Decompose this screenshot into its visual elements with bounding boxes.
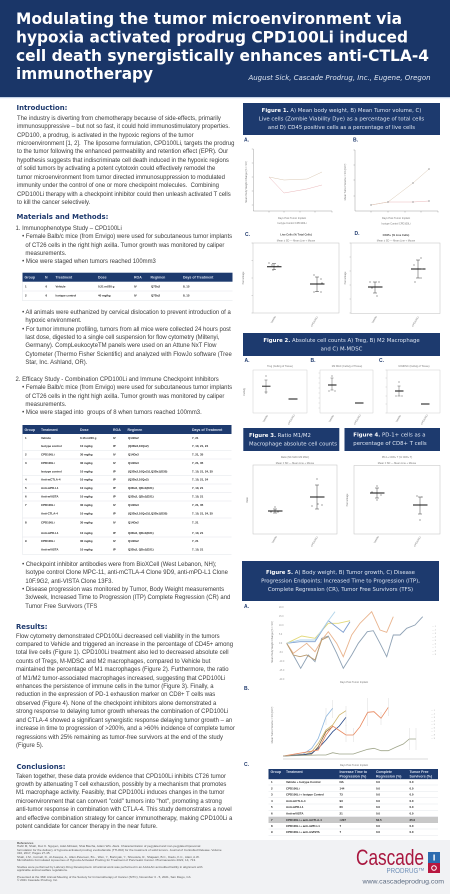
methods table 2: CPD100Li (41, 461, 55, 465)
chart 5B: tumor growth lines: Days Post Tumor Implant (340, 764, 368, 767)
chart 1D: CD45 cells: Mean ± SD — Mean Line + Mouse (377, 240, 416, 242)
methods table 2: 7, 21 (192, 539, 199, 543)
figure 1 caption: and D) CD45 positive cells as a percentage of live cells (268, 125, 415, 131)
logo: Cascade Prodrug: Cascade (356, 845, 424, 870)
chart 1A: mean body weight: Days Post Tumor Implant (278, 217, 306, 220)
chart 5B: tumor growth lines: — 8 (431, 734, 436, 736)
figure 5C table: Anti-mCTLA-4 (286, 799, 306, 803)
figure 5C table: Tumor Free (410, 770, 429, 774)
chart 1A: mean body weight: Isotype Control CPD100Li (278, 222, 307, 225)
figure 5C table: 3 (271, 792, 273, 796)
methods table 2: (Q3Dx2,10Qx2)1,Q3Dx1(D35) (128, 469, 167, 473)
chart 5A: body weight lines: -15.0 (279, 670, 285, 672)
figure 5C table (244, 762, 438, 836)
text: euthanasia and profiling bullets: • All animals were euthanized by cervical dislocation to prevent introduction of a hypoxic environment. • For tumor immune profiling, tumors from all mice were collected 24 hours post last dose, digested to a single cell suspension for flow cytometry (Miltenyi, Germany). CompLeukocyteTM panels were used on an Attune NxT Flow Cytometer (Thermo Fisher Scientific) and analyzed with FlowJo software (Tree Star, Inc. Ashland, OR). (16, 310, 232, 366)
chart 5B: tumor growth lines: — 2 (431, 714, 436, 716)
figure 5C table: CPD100Li + anti-mCTLA-4 (286, 818, 322, 822)
methods table 1: 6 (46, 294, 48, 298)
figure 5C table: Treatment (286, 770, 304, 774)
methods table 1: Isotype control (56, 294, 76, 298)
methods table 2: 30 mg/kg (80, 503, 93, 507)
methods table 2: IV (113, 461, 116, 465)
methods table 2: Isotype control (41, 469, 62, 473)
methods table 1: 8, 15 (183, 294, 190, 298)
methods table 2: 9 (25, 539, 27, 543)
chart 4: PD-1 on CD8: PD-1+ CD8+ T (% CD8+ T) (382, 456, 412, 459)
figure 5C table: 7 (271, 818, 273, 822)
figure 5C table: 1 (271, 780, 273, 784)
chart 1B: mean tumor volume: Days Post Tumor Implant (382, 217, 410, 220)
methods table 2: 10 mg/kg (80, 478, 93, 482)
figure 5C table: 0.0 (410, 792, 414, 796)
figure 2 caption: and C) M-MDSC (321, 346, 363, 352)
chart 1C: live cells: Vehicle (270, 315, 277, 324)
chart 4: PD-1 on CD8: Percentage (346, 493, 349, 506)
chart 2B: M2 macrophage: CPD100Li (353, 414, 362, 425)
title: cell death synergistically enhances anti-CTLA-4 (16, 47, 429, 65)
methods table 1: 40 mg/kg (98, 294, 111, 298)
chart 4: PD-1 on CD8 (346, 456, 440, 547)
chart 2A: Treg: Vehicle (262, 414, 269, 423)
logo: Cascade Prodrug: PRODRUG™ (386, 866, 424, 875)
methods table 2: 2 (25, 453, 27, 457)
chart 5A: body weight lines: 20.0 (279, 607, 284, 609)
text: results: Flow cytometry demonstrated CPD100Li decreased cell viability in the tumors compared to Vehicle and triggered an increase in the percentage of CD45+ among total live cells (Figure 1). CPD100Li treatment also led to decreased absolute cell counts of Tregs, M-MDSC and M2 macrophages, compared to Vehicle but maintained the percentage of M1 macrophages (Figure 2). Furthermore, the ratio of M1/M2 tumor-associated macrophages increased, suggesting that CPD100Li enhances the persistence of immune cells in the tumor (Figure 3). Finally, a reduction in the expression of PD-1 exhaustion marker on CD8+ T cells was observed (Figure 4). None of the checkpoint inhibitors alone demonstrated a strong response to delaying tumor growth whereas the combination of CPD100Li and CTLA-4 showed a significant synergistic response delaying tumor growth – an increase in time to progression of >200%, and a >60% incidence of complete tumor regressions with 25% remaining as tumor-free survivors at the end of the study (Figure 5). (16, 634, 235, 749)
chart 1D: CD45 cells (344, 231, 440, 327)
chart 5A: body weight lines: -10.0 (279, 661, 285, 663)
methods table 1: Dose (98, 276, 107, 280)
methods table 1: Regimen (150, 276, 165, 280)
chart 5A: body weight lines: — 8 (432, 650, 437, 652)
chart 5A: body weight lines (244, 604, 437, 684)
methods table 1: Q7Dx2 (151, 284, 161, 288)
chart 5A: body weight lines: 10.0 (279, 625, 284, 627)
methods table 1: Group (24, 276, 35, 280)
figure 5C table: 0.0 (410, 805, 414, 809)
chart 1D: CD45 cells: Percentage (344, 271, 347, 284)
heading: conclusions: Conclusions: (16, 762, 66, 770)
methods table 2: Q14Dx2 (128, 521, 139, 525)
chart 1D: CD45 cells: D. (354, 231, 360, 237)
chart 5B: tumor growth lines: — 9 (431, 738, 436, 740)
figure 5C table: >207 (340, 818, 346, 822)
figure 5C table: 73 (340, 792, 343, 796)
title: immunotherapy (16, 65, 153, 83)
methods table 2: 3 (25, 461, 27, 465)
chart 5A: body weight lines: Days Post Tumor Implant (340, 681, 368, 684)
chart 1B: mean tumor volume: Isotype Control CPD100Li (382, 222, 411, 226)
figure 5C table: 5 (271, 805, 273, 809)
methods table 2: CPD100Li (41, 453, 55, 457)
chart 2C: M-MDSC: Vehicle (395, 414, 402, 423)
methods table 2: 10 mg/kg (80, 444, 93, 448)
chart 3: M1/M2 ratio (246, 456, 337, 547)
figure 5C table: NA (340, 780, 345, 784)
website url: www.cascadeprodrug.com (361, 878, 444, 885)
chart 1A: mean body weight (244, 138, 332, 225)
methods table 2: 30 mg/kg (80, 521, 93, 525)
chart 1A: mean body weight: A. (244, 138, 250, 144)
methods table 2: Anti-mVISTA (41, 494, 59, 498)
chart 5B: tumor growth lines: — 3 (431, 717, 436, 719)
figure 5C table: 7 (340, 830, 342, 834)
figure 5C table: 0.0 (410, 799, 414, 803)
chart 1D: CD45 cells: Vehicle (371, 315, 378, 324)
figure 5C table: 4 (271, 799, 273, 803)
chart 3: M1/M2 ratio: Ratio (246, 496, 249, 503)
methods table 2: (Q3Dx2,10Qx2) (128, 478, 149, 482)
chart 1C: live cells: CPD100Li (310, 316, 319, 327)
chart 5A: body weight lines: A. (244, 604, 250, 610)
methods table 2: 1 (25, 436, 27, 440)
methods table 2: 10 mg/kg (80, 469, 93, 473)
figure 5C table: 7 (340, 824, 342, 828)
methods table 2: Q3Dx2, QDx1(D21) (128, 486, 154, 490)
figure 5C table: 0.0 (376, 805, 380, 809)
figure 5C table: Increase Time to (340, 770, 367, 774)
methods table 1 (22, 273, 232, 301)
figure 4 caption: Figure 4. PD-1+ cells as a (353, 432, 426, 438)
methods table 2: IV (113, 521, 116, 525)
methods table 2: Q14Dx2 (128, 436, 139, 440)
figure 5C table: CPD100Li + anti-mVISTA (286, 830, 321, 834)
chart 5A: body weight lines: 0.0 (279, 643, 283, 645)
chart 5B: tumor growth lines: — 5 (431, 724, 436, 726)
header band (0, 0, 450, 98)
figure 5C table: Complete (376, 770, 392, 774)
chart 2A: Treg: CPD100Li (287, 414, 296, 425)
methods table 2: 30 mg/kg (80, 453, 93, 457)
methods table 2: IP (113, 444, 116, 448)
methods table 2: 10 mg/kg (80, 548, 93, 552)
methods table 2: Group (24, 428, 35, 432)
methods table 2: 7, 10, 21, 24 (192, 478, 208, 482)
methods table 2: IP (113, 512, 116, 516)
methods table 2: (Q3Dx2,10Qx2) (128, 444, 149, 448)
figure 2 caption: Figure 2. Absolute cell counts A) Treg, B) M2 Macrophage (263, 338, 420, 344)
figure 5C table: Anti-mVISTA (286, 811, 304, 815)
chart 1C: live cells: Percentage (242, 271, 245, 284)
figure 3 caption: Macrophage absolute cell counts (249, 442, 337, 448)
chart 5B: tumor growth lines: — 6 (431, 728, 436, 730)
figure 5 caption (242, 561, 439, 601)
chart 5B: tumor growth lines: — 7 (431, 731, 436, 733)
chart 5B: tumor growth lines: B. (244, 686, 250, 692)
author line: August Sick, Cascade Prodrug, Inc., Eugene, Oregon (247, 74, 430, 82)
text: introduction: The industry is diverting from chemotherapy because of side-effects, primarily immunosuppressive – but not so fast, it could hold immunostimulatory properties. CPD100, a prodrug, is activated in the hypoxic regions of the tumor microenvironment [1, 2]. The liposome formulation, CPD100Li, targets the prodrug to the tumor following the enhanced permeability and retention effect (EPR). Our hypothesis suggests that indiscriminate cell death induced in the hypoxic regions of solid tumors by activating a potent cytotoxin could effectively remodel the tumor microenvironment from tumor directed immunosuppression to modulated immunity under the control of one or more checkpoint molecules. Combining CPD100Li therapy with a checkpoint inhibitor could then unleash activated T cells to kill the cancer selectively. (17, 116, 234, 206)
methods table 2: Q14Dx2 (128, 539, 139, 543)
figure 5C table: 0.0 (376, 799, 380, 803)
methods table 1: Treatment (56, 276, 73, 280)
figure 5C table: 6 (271, 811, 273, 815)
heading: materials and methods: Materials and Methods: (16, 212, 108, 220)
methods table 2: 7, 10, 21, 24 (192, 444, 208, 448)
chart 5A: body weight lines: — 9 (432, 654, 437, 656)
methods table 2: 7, 21 (192, 436, 199, 440)
methods table 2: Anti-CTLA-4 (41, 512, 58, 516)
methods table 1: N (45, 276, 48, 280)
chart 4: PD-1 on CD8: Mean ± SD — Mean Line + Mouse (378, 462, 417, 465)
chart 1C: live cells: Live Cells (% Total Cells) (280, 232, 312, 236)
chart 2B: M2 macrophage: M2 MAC (Cells/g of Tissue) (332, 365, 362, 368)
methods table 2: 7, 10, 21, 24, 35 (192, 512, 213, 516)
chart 1A: mean body weight: Mean Body Weight Change (% ± SD) (245, 161, 248, 203)
methods table 2: IV (113, 453, 116, 457)
figure 5C table: CPD100Li + anti-mPD-L1 (286, 824, 320, 828)
methods table 2: CPD100Li (41, 539, 55, 543)
chart 1C: live cells: C. (245, 232, 251, 238)
methods table 1: IV (134, 284, 137, 288)
figure 1 caption (243, 103, 440, 135)
text: references and footnotes: References Hafiz M, Shah, Duc K. Nguyen, Adel Athkawi, Shai Biecha, Adam WG. Alani. Characterization of pegylated and non-pegylated liposomal formulation for the delivery of hypoxia activated prodrug evofosfamide (TH-302) for the treatment of solid tumors. Journal of Controlled Release. Volume 316, 2017, Pages 27-45. Shah, J.M., Cornell, D., Al-Kasspa, A., Allen-Petersen, B.L., Wen, Y., Bortnyak, Y., Shrestula, R., Shajaani, B.C., Davis, K.C., Alani, A.W. Microfluidics Formulated Liposomes of Hypoxia Activated Prodrug for Treatment of Pancreatic Cancer. Pharmaceutics 2022, 14, 713. Studies were performed by Labcorp Drug Development. All animal work was performed in an AAALAC accredited facility in alignment with applicable animal welfare regulations. Presented at the 36th Annual Meeting of the Society for Immunotherapy of Cancer (SITC), November 3 - 5, 2021, San Diego, CA © 2021 Cascade Prodrug, Inc. (17, 841, 222, 882)
chart 1D: CD45 cells: CPD100Li (411, 316, 420, 327)
chart 5A: body weight lines: — 5 (432, 640, 437, 642)
methods table 2: 7, 21, 35 (192, 453, 204, 457)
chart 3: M1/M2 ratio: Mean ± SD — Mean Line + Mouse (276, 462, 315, 465)
methods table 2: 10 mg/kg (80, 512, 93, 516)
methods table 2: Treatment (41, 428, 59, 432)
methods table 2: 7 (25, 503, 27, 507)
chart 2C: M-MDSC: C. (379, 358, 385, 364)
title: hypoxia activated prodrug CPD100Li induced (16, 28, 408, 46)
chart 5A: body weight lines: 15.0 (279, 616, 284, 618)
chart 2B: M2 macrophage (310, 358, 373, 425)
methods table 2: 5 (25, 486, 27, 490)
methods table 2: 30 mg/kg (80, 539, 93, 543)
methods table 2: Q14Dx3 (128, 461, 139, 465)
methods table 1: 0.21 ml/20 g (98, 284, 115, 288)
methods table 2: IP (113, 548, 116, 552)
figure 3 caption: Figure 3. Ratio M1/M2 (249, 433, 311, 439)
figure 5C table: CPD100Li + Isotype Control (286, 792, 324, 796)
chart 2C: M-MDSC: CPD100Li (420, 414, 429, 425)
chart 1B: mean tumor volume: B. (353, 138, 359, 144)
chart 5A: body weight lines: — 4 (432, 636, 437, 638)
heading: introduction: Introduction: (16, 104, 67, 112)
chart 1B: mean tumor volume (344, 138, 438, 226)
chart 5B: tumor growth lines (244, 686, 436, 767)
chart 2A: Treg: Cells/g (243, 388, 246, 396)
methods table 2: 6 (25, 494, 27, 498)
chart 2A: Treg (243, 358, 307, 425)
figure 4 caption: percentage of CD8+ T cells (353, 441, 427, 447)
methods table 2: ROA (113, 428, 121, 432)
figure 5C table: 0.0 (410, 830, 414, 834)
chart 2C: M-MDSC (379, 358, 440, 425)
text: efficacy study: 2. Efficacy Study - Combination CPD100Li and Immune Checkpoint Inhibitors • Female Balb/c mice (from Envigo) were used for subcutaneous tumor implants of CT26 cells in the right high axilla. Tumor growth was monitored by caliper measurements. • Mice were staged into groups of 8 when tumors reached 100mm3. (16, 377, 232, 416)
figure 5C table: 0.0 (376, 824, 380, 828)
figure 5C table: Vehicle + Isotype Control (286, 780, 321, 784)
figure 5C table: 0.0 (410, 824, 414, 828)
methods table 1: 1 (25, 284, 27, 288)
methods table 2: Regimen (128, 428, 142, 432)
methods table 2: 10 mg/kg (80, 494, 93, 498)
figure 5C table: C. (244, 762, 250, 768)
figure 3 caption (243, 428, 339, 451)
chart 5A: body weight lines: -20.0 (279, 679, 285, 681)
figure 5C table: 0.0 (376, 792, 380, 796)
chart 5B: tumor growth lines: — 4 (431, 720, 436, 722)
methods table 2: Q14Dx3 (128, 453, 139, 457)
chart 4: PD-1 on CD8: CPD100Li (413, 536, 422, 547)
figure 5C table: Survivors (%) (410, 774, 432, 778)
figure 1 caption: Live cells (Zombie Viability Dye) as a percentage of total cells (259, 116, 424, 122)
methods table 2: Anti-mCTLA-4 (41, 478, 61, 482)
methods table 1: ROA (134, 276, 142, 280)
figure 5C table: 8 (271, 824, 273, 828)
figure 5C table: Regression (%) (376, 774, 401, 778)
methods table 2: 7, 21, 35 (192, 503, 204, 507)
figure 5C table: 93 (340, 799, 343, 803)
figure 5C table: 0.0 (376, 811, 380, 815)
methods table 1: Days of Treatment (183, 276, 214, 280)
methods table 1: 2 (25, 294, 27, 298)
text: conclusions: Taken together, these data provide evidence that CPD100Li inhibits CT26 tumor growth by attenuating T cell exhaustion, possibly by a mechanism that promotes M1 macrophage activity. Feasibly, that CPD100Li induces changes in the tumor microenvironment that can convert "cold" tumors into "hot", promoting a strong anti-tumor response in combination with CTLA-4. This study demonstrates a novel and effective combination strategy for cancer immunotherapy, making CPD100Li a potent candidate for cancer therapy in the near future. (16, 774, 232, 830)
chart 5A: body weight lines: — 6 (432, 644, 437, 646)
methods table 2: (Q3Dx2,10Qx2)1,Q3Dx1(D35) (128, 512, 167, 516)
methods table 2: 7, 10, 21 (192, 548, 204, 552)
methods table 2: Days of Treatment (192, 428, 223, 432)
figure 5C table: CPD100Li (286, 786, 300, 790)
methods table 1: 6 (46, 284, 48, 288)
chart 5A: body weight lines: 5.0 (279, 634, 283, 636)
title (16, 10, 429, 83)
chart 2A: Treg: Treg (Cells/g of Tissue) (267, 365, 293, 368)
methods table 2 (22, 425, 232, 554)
methods table 2: Q3Dx2, QDx1(D21) (128, 548, 154, 552)
methods table 2: 7, 10, 21 (192, 531, 204, 535)
chart 5A: body weight lines: Mean Body Weight Change (% ± SD) (271, 621, 274, 663)
chart 2B: M2 macrophage: Vehicle (328, 414, 335, 423)
chart 5B: tumor growth lines: — 1 (431, 710, 436, 712)
figure 5C table: 0.0 (410, 811, 414, 815)
title: Modulating the tumor microenvironment via (16, 10, 402, 28)
methods table 2: 10 mg/kg (80, 531, 93, 535)
methods table 2: 10 mg/kg (80, 486, 93, 490)
methods table 2: IP (113, 486, 116, 490)
methods table 2: 0.16 ml/20 g (80, 436, 97, 440)
chart 5B: tumor growth lines: Mean Tumor Volume ± SD (mm³) (271, 707, 274, 743)
footer band (0, 840, 450, 894)
figure 5 caption: Figure 5. A) Body weight, B) Tumor growth, C) Disease (266, 570, 415, 576)
figure 5C table: 21 (340, 811, 343, 815)
methods table 2: Q14Dx3 (128, 503, 139, 507)
figure 5C table: 2 (271, 786, 273, 790)
chart 1C: live cells: Mean ± SD — Mean Line + Mouse (277, 240, 316, 242)
figure 4 caption (344, 428, 440, 451)
methods table 2: Anti-mVISTA (41, 548, 59, 552)
methods table 1: Vehicle (56, 284, 66, 288)
figure 5C table: 0.0 (410, 780, 414, 784)
chart 2C: M-MDSC: M-MDSC (Cells/g of Tissue) (399, 365, 430, 368)
figure 5C table: 9 (271, 830, 273, 834)
text: immunophenotype study: 1. Immunophenotype Study – CPD100Li • Female Balb/c mice (from Envigo) were used for subcutaneous tumor implants of CT26 cells in the right high axilla. Tumor growth was monitored by caliper measurements. • Mice were staged when tumors reached 100mm3 (16, 226, 232, 265)
chart 5A: body weight lines: — 2 (432, 630, 437, 632)
methods table 2: IP (113, 478, 116, 482)
chart 3: M1/M2 ratio: CPD100Li (310, 536, 319, 547)
chart 2A: Treg: A. (244, 358, 250, 364)
figure 1 caption: Figure 1. A) Mean body weight, B) Mean Tumor volume, C) (262, 108, 421, 114)
heading: results: Results: (16, 622, 48, 630)
methods table 2: IP (113, 494, 116, 498)
chart 5A: body weight lines: — 7 (432, 647, 437, 649)
methods table 2: Anti-mPD-L1 (41, 486, 59, 490)
chart 1D: CD45 cells: CD45+ (% Live Cells) (383, 233, 409, 237)
chart 4: PD-1 on CD8: Vehicle (373, 535, 380, 544)
chart 3: M1/M2 ratio: Ratio (M1 MAC:M2 MAC) (281, 456, 309, 459)
methods table 2: 30 mg/kg (80, 461, 93, 465)
figure 5C table: Anti-mPD-L1 (286, 805, 304, 809)
methods table 2: Q3Dx2, QDx1(D21) (128, 531, 154, 535)
methods table 1: 8, 15 (183, 284, 190, 288)
chart 2B: M2 macrophage: B. (310, 358, 316, 364)
methods table 2: 4 (25, 478, 27, 482)
chart 5A: body weight lines: — 3 (432, 633, 437, 635)
methods table 2: 7, 10, 21, 24, 35 (192, 469, 213, 473)
methods table 2: IV (113, 436, 116, 440)
figure 5C table: 0.0 (410, 786, 414, 790)
figure 5 caption: Progression Endpoints; Increased Time to Progression (ITP), (261, 578, 420, 584)
methods table 2: IP (113, 469, 116, 473)
figure 5C table: 144 (340, 786, 345, 790)
methods table 2: IV (113, 539, 116, 543)
methods table 2: Anti-mPD-L1 (41, 531, 59, 535)
methods table 1: Q7Dx2 (151, 294, 161, 298)
figure 5C table: 62.5 (376, 818, 382, 822)
methods table 2: CPD100Li (41, 503, 55, 507)
chart 1C: live cells (242, 232, 339, 327)
methods table 2: IV (113, 503, 116, 507)
chart 5A: body weight lines: — 1 (432, 626, 437, 628)
methods table 1: IV (134, 294, 137, 298)
figure 5C table: Group (270, 770, 281, 774)
methods table 2: IP (113, 531, 116, 535)
figure 5C table: 25.0 (410, 818, 416, 822)
methods table 2: Q3Dx2, QDx1(D21) (128, 494, 154, 498)
figure 5 caption: Complete Regression (CR), Tumor Free Survivors (TFS) (268, 587, 413, 593)
methods table 2: 7, 21 (192, 521, 199, 525)
chart 3: M1/M2 ratio: Vehicle (271, 535, 278, 544)
figure 5C table: Progression (%) (340, 774, 366, 778)
figure 5C table: 60 (340, 805, 343, 809)
figure 2 caption (243, 333, 440, 356)
methods table 2: Dose (80, 428, 89, 432)
methods table 2: CPD100Li (41, 521, 55, 525)
methods table 2: 7, 10, 21 (192, 486, 204, 490)
figure 5C table: 0.0 (376, 780, 380, 784)
methods table 2: 8 (25, 521, 27, 525)
methods table 2: Vehicle (41, 436, 51, 440)
methods table 2: 7, 21, 35 (192, 461, 204, 465)
text: checkpoint inhibitor bullets: • Checkpoint inhibitor antibodies were from BioXCell (West Lebanon, NH); Isotype control Clone MPC-11, anti-mCTLA-4 Clone 9D9, anti-mPD-L1 Clone 10F.9G2, anti-VISTA Clone 13F3. • Disease progression was monitored by Tumor, Body Weight measurements 3x/week, Increased Time to Progression (ITP) Complete Regression (CR) and Tumor Free Survivors (TFS (16, 562, 230, 610)
figure 5C table: 0.0 (376, 786, 380, 790)
methods table 2: 7, 10, 21 (192, 494, 204, 498)
methods table 2: Isotype control (41, 444, 62, 448)
figure 5C table: 0.0 (376, 830, 380, 834)
chart 1B: mean tumor volume: Mean Tumor Volume ± SD (mm³) (344, 164, 347, 200)
chart 5A: body weight lines: -5.0 (279, 652, 284, 654)
